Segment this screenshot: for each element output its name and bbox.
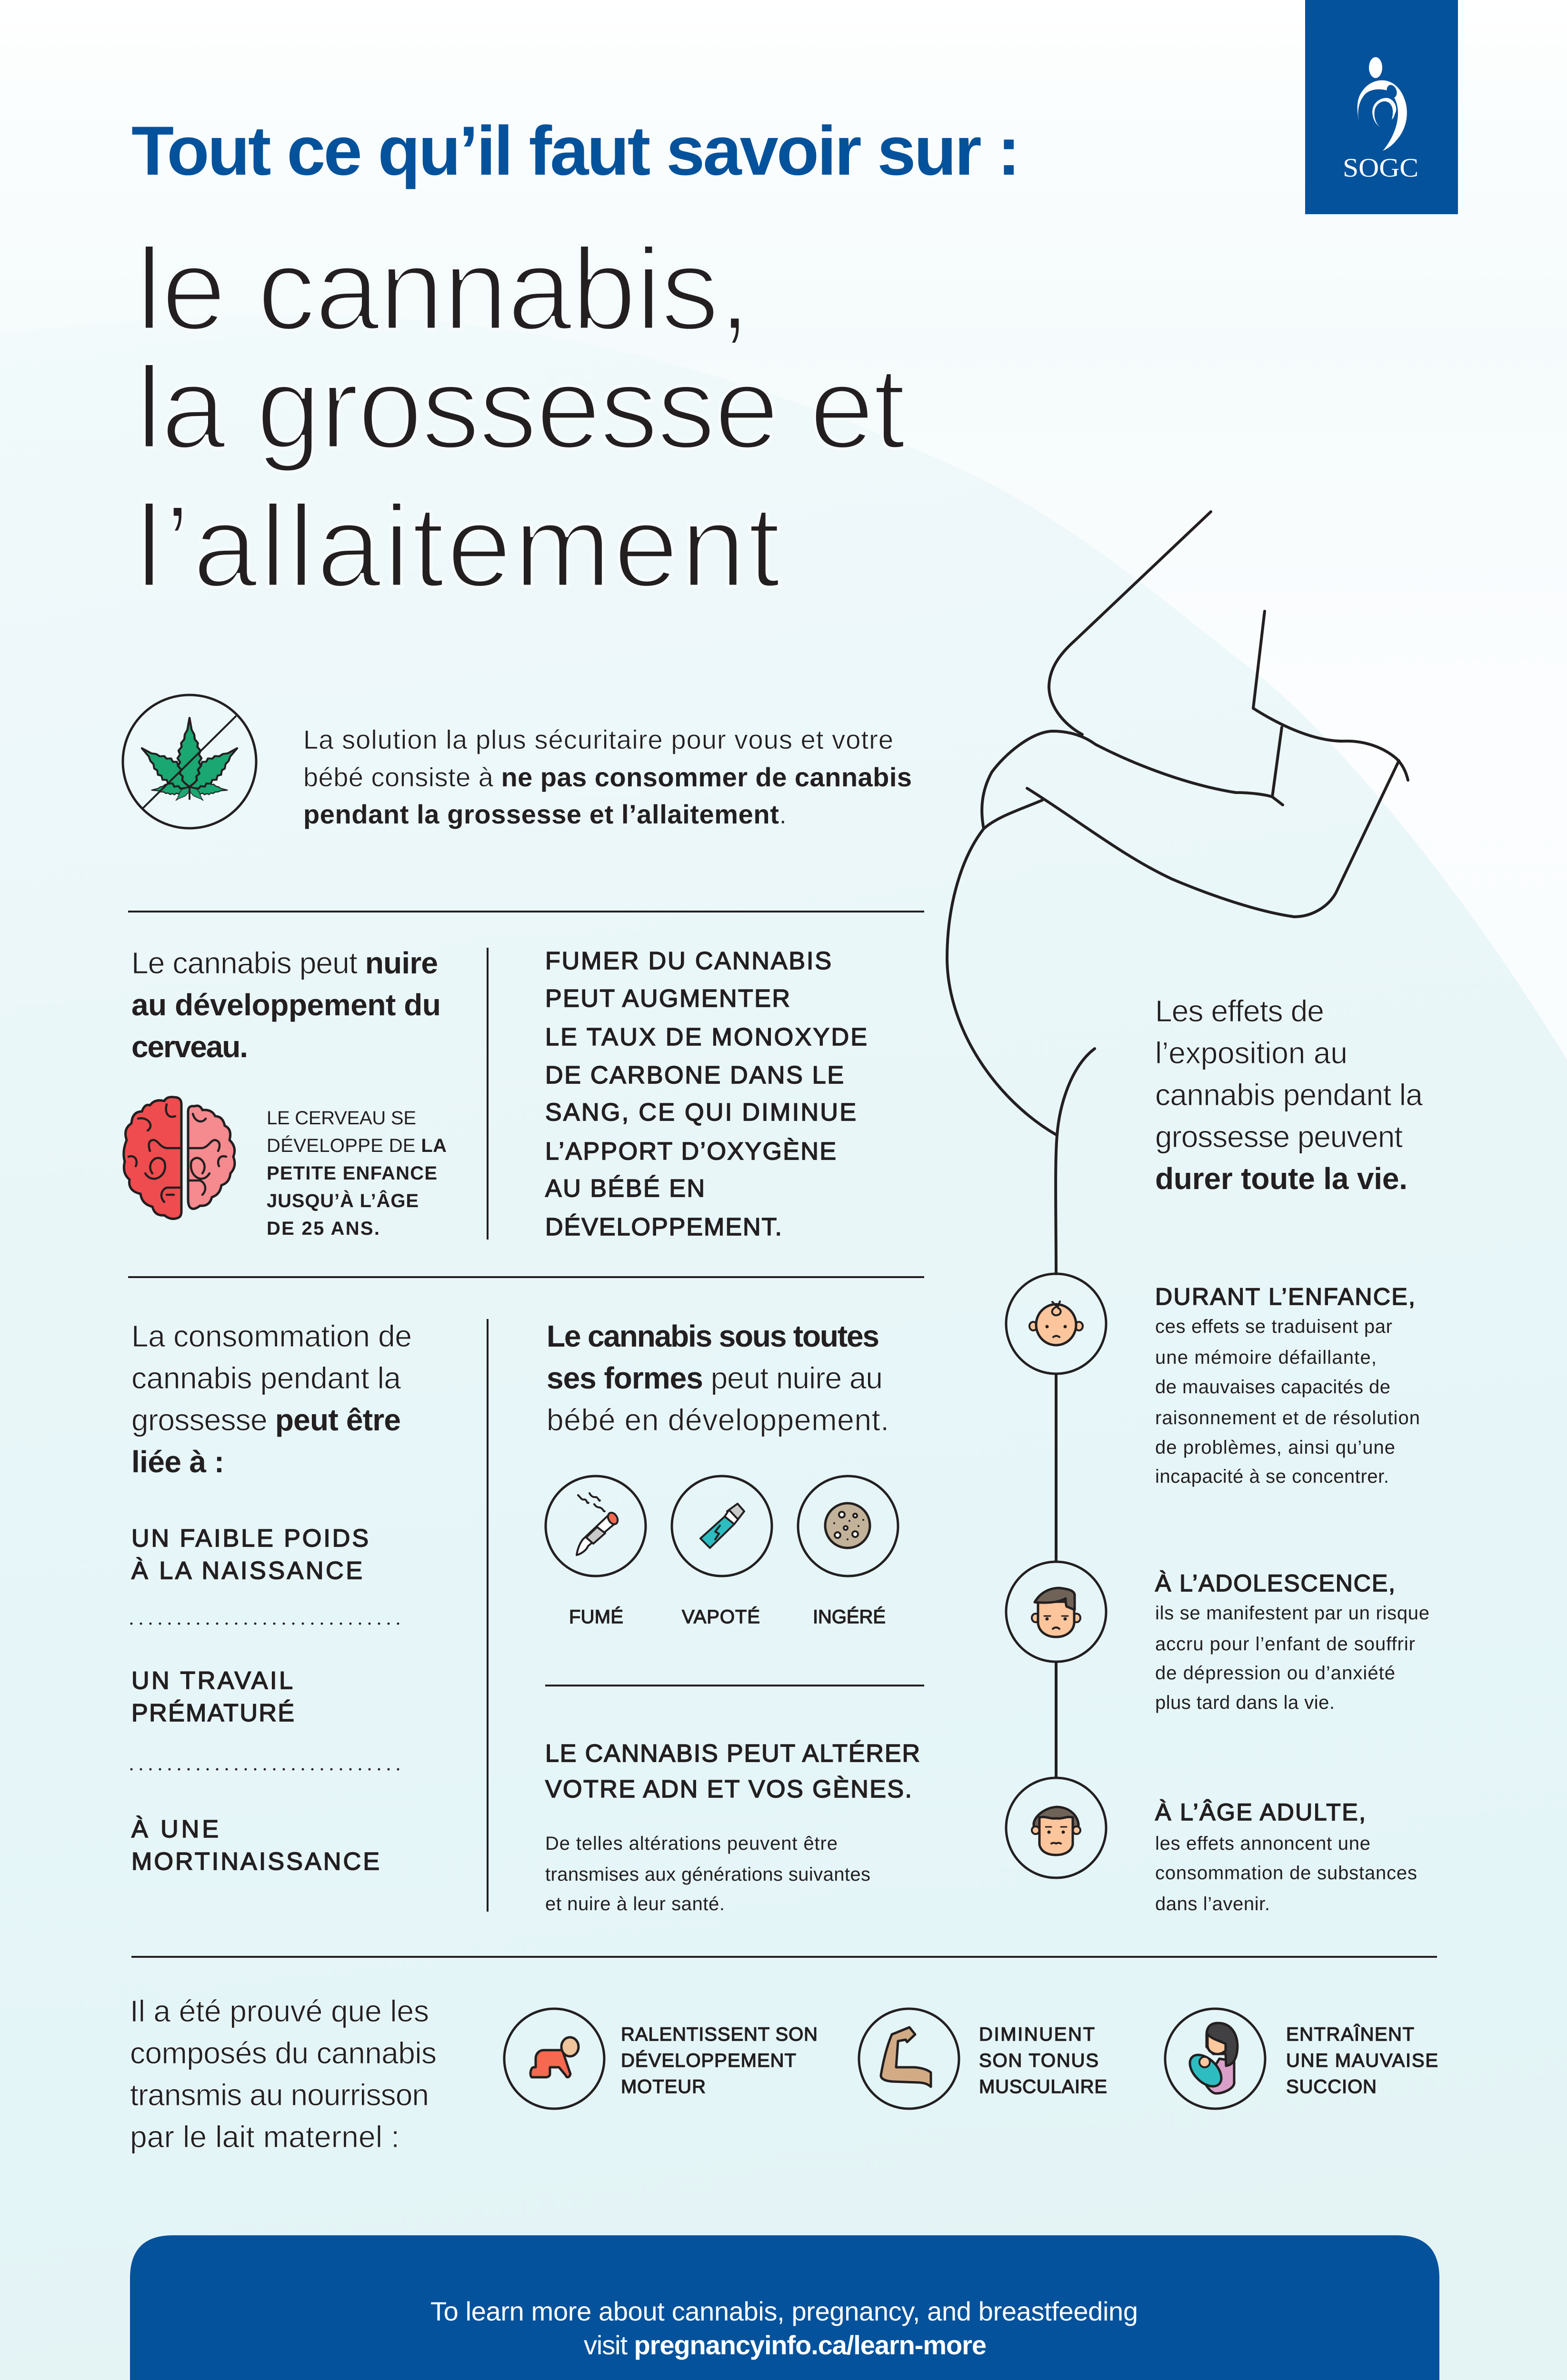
list: risks: À LA NAISSANCE — [131, 1557, 362, 1585]
text: smoking: AU BÉBÉ EN — [545, 1175, 705, 1202]
intro text: La solution la plus sécuritaire pour vous et votre — [303, 724, 893, 754]
text: breast milk: composés du cannabis — [130, 2036, 437, 2070]
text: breast milk: par le lait maternel : — [130, 2120, 399, 2154]
logo: SOGC — [1305, 0, 1458, 214]
labels: forms: INGÉRÉ — [813, 1606, 886, 1627]
divider — [545, 1685, 924, 1686]
text: childhood: incapacité à se concentrer. — [1155, 1466, 1389, 1487]
text: sucking: UNE MAUVAISE — [1286, 2050, 1438, 2071]
text: sucking — [1286, 2023, 1438, 2097]
text: adulthood: consommation de substances — [1155, 1863, 1417, 1884]
text: childhood: DURANT L’ENFANCE, — [1155, 1283, 1415, 1310]
vertical divider — [487, 948, 489, 1240]
text: breast milk: transmis au nourrisson — [130, 2078, 429, 2112]
text: childhood: ces effets se traduisent par — [1155, 1316, 1392, 1337]
text: adulthood: les effets annoncent une — [1155, 1833, 1370, 1854]
text: linked to: grossesse peut être — [131, 1403, 401, 1437]
text: linked to — [131, 1319, 412, 1479]
footer panel: visit pregnancyinfo.ca/learn-more — [584, 2330, 987, 2360]
list: risks: UN TRAVAIL — [131, 1667, 293, 1695]
divider — [131, 1956, 1437, 1958]
title: main: le cannabis, — [136, 224, 751, 354]
list: risks — [131, 1525, 379, 1875]
text: adolescence: plus tard dans la vie. — [1155, 1692, 1335, 1713]
text: linked to: La consommation de — [131, 1319, 412, 1353]
text: effects intro: durer toute la vie. — [1155, 1161, 1407, 1196]
timeline — [1055, 1374, 1058, 1778]
divider — [128, 1276, 924, 1278]
text: brain development — [131, 946, 441, 1064]
text: brain development: au développement du — [131, 988, 441, 1022]
intro text — [303, 724, 912, 829]
text: adolescence: ils se manifestent par un risque — [1155, 1603, 1429, 1624]
text: childhood: raisonnement et de résolution — [1155, 1408, 1420, 1428]
text: brain age: DÉVELOPPE DE LA — [267, 1135, 447, 1156]
text: sucking: ENTRAÎNENT — [1286, 2023, 1414, 2045]
text: brain age: LE CERVEAU SE — [267, 1108, 416, 1129]
text: effects intro: l’exposition au — [1155, 1036, 1347, 1070]
text: smoking: FUMER DU CANNABIS — [545, 947, 831, 975]
text: brain age: DE 25 ANS. — [267, 1218, 379, 1239]
text: DNA — [545, 1740, 920, 1803]
intro text: pendant la grossesse et l’allaitement. — [303, 799, 787, 829]
text: all forms: Le cannabis sous toutes — [547, 1319, 879, 1353]
text: breast milk: Il a été prouvé que les — [130, 1994, 429, 2028]
text: DNA detail: et nuire à leur santé. — [545, 1894, 725, 1914]
title: main: l’allaitement — [136, 481, 780, 611]
text: motor development: MOTEUR — [621, 2076, 706, 2097]
text: linked to: liée à : — [131, 1445, 224, 1479]
text: DNA detail: De telles altérations peuvent être — [545, 1833, 838, 1854]
text: adulthood: À L’ÂGE ADULTE, — [1155, 1799, 1366, 1825]
text: all forms — [547, 1319, 889, 1437]
icon: teen face — [1006, 1562, 1106, 1662]
text: all forms: bébé en développement. — [547, 1403, 889, 1437]
icon: vaped — [672, 1476, 772, 1576]
text: smoking: DE CARBONE DANS LE — [545, 1061, 844, 1089]
text: muscle tone: DIMINUENT — [979, 2024, 1095, 2045]
text: childhood — [1155, 1283, 1420, 1487]
list: risks: PRÉMATURÉ — [131, 1699, 294, 1727]
labels: forms — [569, 1606, 886, 1627]
text: DNA detail — [545, 1833, 870, 1914]
icon: baby face — [1006, 1274, 1106, 1374]
text: adolescence: accru pour l’enfant de souffrir — [1155, 1634, 1415, 1655]
text: muscle tone: MUSCULAIRE — [979, 2076, 1107, 2097]
text: DNA: LE CANNABIS PEUT ALTÉRER — [545, 1740, 920, 1767]
text: effects intro: Les effets de — [1155, 994, 1324, 1028]
title: main — [136, 224, 906, 611]
footer panel: To learn more about cannabis, pregnancy, and breastfeeding — [430, 2296, 1138, 2326]
text: brain development: Le cannabis peut nuire — [131, 946, 438, 980]
intro text: bébé consiste à ne pas consommer de cannabis — [303, 762, 912, 792]
list: risks: UN FAIBLE POIDS — [131, 1525, 369, 1552]
text: childhood: de mauvaises capacités de — [1155, 1377, 1390, 1398]
icon: adult face — [1006, 1778, 1106, 1878]
divider — [128, 911, 924, 912]
illustration: pregnant silhouette — [947, 512, 1408, 1274]
labels: forms: FUMÉ — [569, 1606, 623, 1627]
text: motor development: DÉVELOPPEMENT — [621, 2050, 796, 2071]
text: brain development: cerveau. — [131, 1030, 248, 1064]
icon: brain — [124, 1097, 235, 1219]
text: adolescence: de dépression ou d’anxiété — [1155, 1663, 1395, 1684]
text: sucking: SUCCION — [1286, 2076, 1377, 2097]
text: smoking: L’APPORT D’OXYGÈNE — [545, 1138, 836, 1165]
text: adolescence: À L’ADOLESCENCE, — [1155, 1570, 1395, 1597]
text: motor development — [621, 2024, 818, 2097]
icon: crawling baby — [504, 2009, 604, 2109]
icon: arm muscle — [859, 2009, 959, 2109]
text: childhood: une mémoire défaillante, — [1155, 1347, 1377, 1368]
text: DNA: VOTRE ADN ET VOS GÈNES. — [545, 1775, 912, 1803]
title: main: la grossesse et — [136, 342, 906, 473]
icon: ingested — [798, 1476, 898, 1576]
text: brain age: JUSQU’À L’ÂGE — [267, 1190, 419, 1211]
footer panel — [130, 2235, 1439, 2380]
text: effects intro — [1155, 994, 1423, 1196]
text: muscle tone — [979, 2024, 1107, 2097]
icon: mother and baby — [1165, 2009, 1265, 2109]
text: smoking — [545, 947, 867, 1241]
text: effects intro: grossesse peuvent — [1155, 1120, 1403, 1154]
text: smoking: LE TAUX DE MONOXYDE — [545, 1023, 867, 1051]
text: all forms: ses formes peut nuire au — [547, 1361, 883, 1395]
icon: no cannabis — [123, 695, 256, 828]
title: kicker: Tout ce qu’il faut savoir sur : — [131, 112, 1020, 189]
text: adulthood: dans l’avenir. — [1155, 1894, 1270, 1914]
text: brain age: PETITE ENFANCE — [267, 1163, 437, 1184]
vertical divider — [487, 1319, 489, 1912]
text: smoking: DÉVELOPPEMENT. — [545, 1213, 782, 1241]
text: smoking: SANG, CE QUI DIMINUE — [545, 1099, 856, 1126]
list: risks: MORTINAISSANCE — [131, 1848, 379, 1875]
text: linked to: cannabis pendant la — [131, 1361, 401, 1395]
text: muscle tone: SON TONUS — [979, 2050, 1098, 2071]
text: adolescence — [1155, 1570, 1429, 1713]
list: risks: À UNE — [131, 1815, 219, 1843]
labels: forms: VAPOTÉ — [682, 1606, 760, 1627]
logo: SOGC: SOGC — [1343, 153, 1418, 183]
icon: smoked — [546, 1476, 646, 1576]
text: adulthood — [1155, 1799, 1417, 1914]
text: motor development: RALENTISSENT SON — [621, 2024, 818, 2045]
text: breast milk — [130, 1994, 437, 2154]
text: smoking: PEUT AUGMENTER — [545, 985, 790, 1012]
text: brain age — [267, 1108, 447, 1239]
text: effects intro: cannabis pendant la — [1155, 1078, 1423, 1112]
text: DNA detail: transmises aux générations suivantes — [545, 1864, 870, 1885]
text: childhood: de problèmes, ainsi qu’une — [1155, 1437, 1395, 1458]
